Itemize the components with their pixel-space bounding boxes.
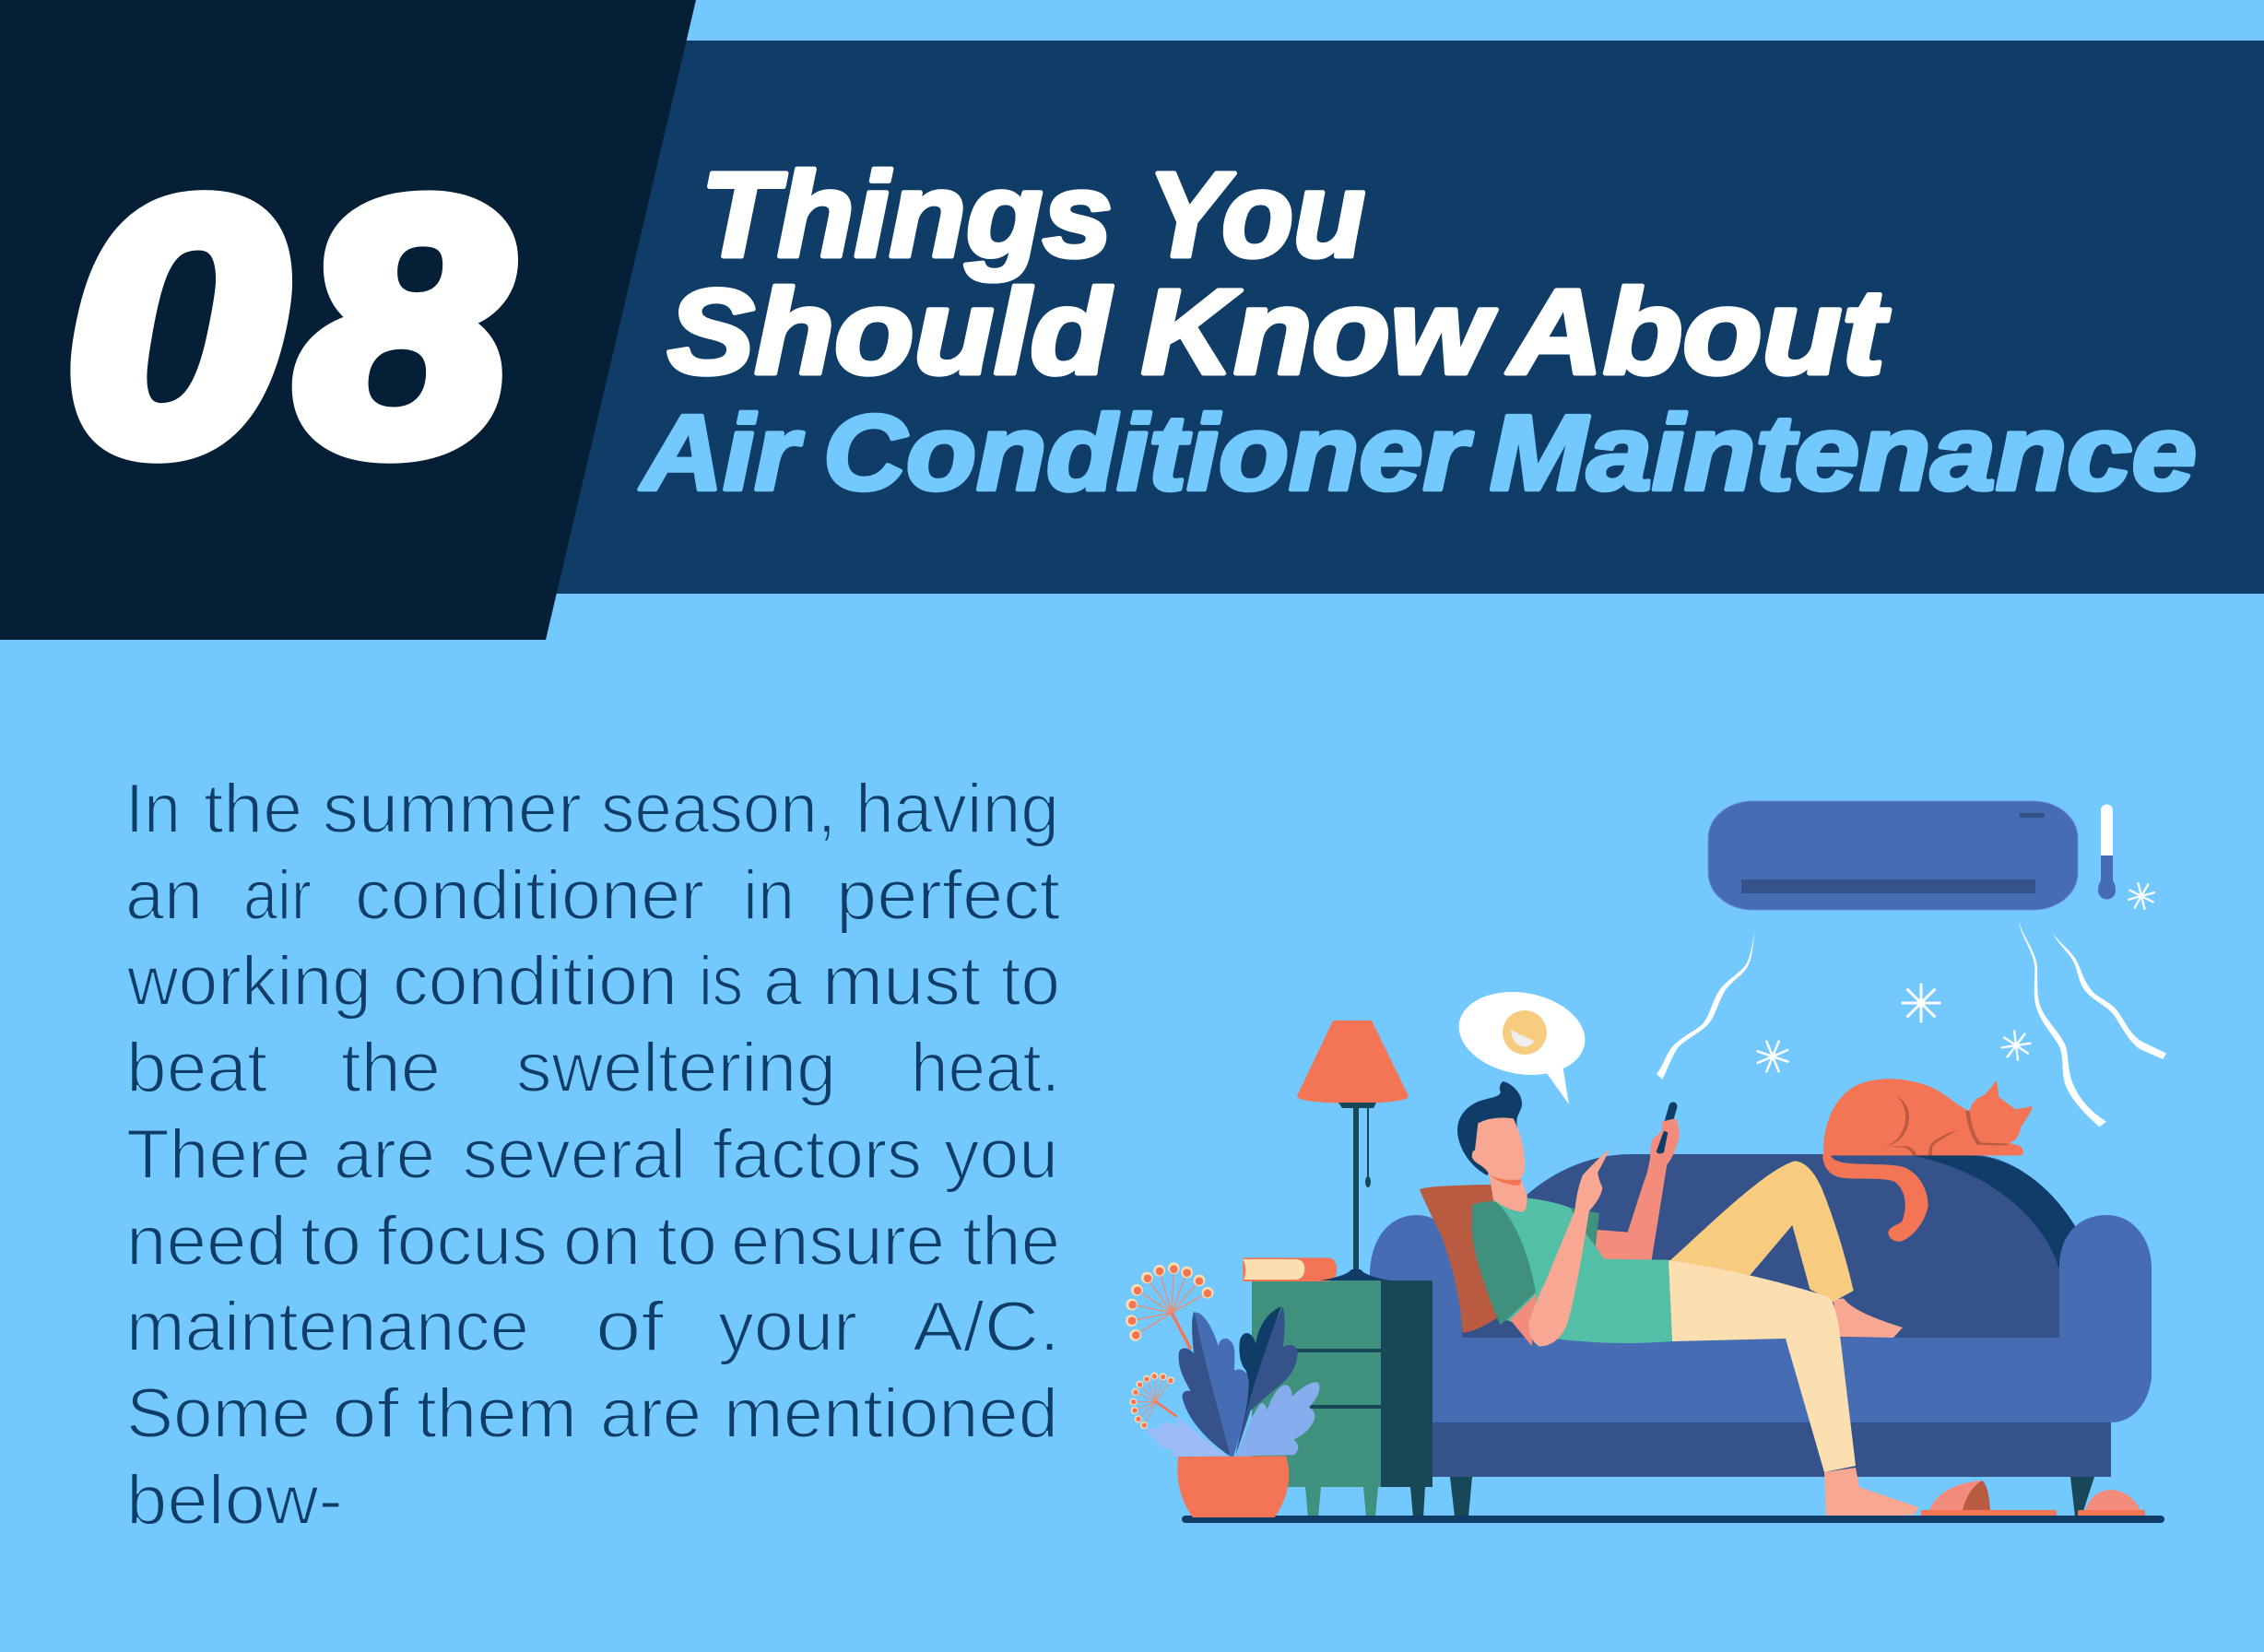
flower bud centres — [1128, 1265, 1211, 1428]
title — [639, 147, 2197, 513]
body paragraph: working — [126, 942, 371, 1021]
body paragraph: perfect — [836, 856, 1060, 935]
body paragraph: in — [743, 856, 795, 935]
title line 1: Things — [701, 147, 1113, 282]
body paragraph — [125, 770, 1060, 1540]
title line 3: Conditioner — [823, 393, 1473, 513]
body paragraph: In — [125, 770, 181, 848]
back leg and foot — [1670, 1161, 1903, 1338]
title line 2: Should — [667, 264, 1113, 399]
body paragraph: them — [417, 1375, 577, 1453]
cat — [1822, 1079, 2033, 1242]
potted plant — [1146, 1306, 1320, 1517]
title line 3: Air — [639, 393, 804, 513]
body paragraph: are — [600, 1375, 702, 1453]
cat body — [1823, 1079, 2033, 1155]
flower stems — [1131, 1268, 1208, 1425]
body paragraph: sweltering — [516, 1029, 836, 1107]
plant leaves — [1146, 1306, 1320, 1457]
sofa seat and arms — [1370, 1215, 2152, 1422]
air conditioner unit — [1708, 801, 2078, 910]
flowers — [1126, 1262, 1213, 1429]
slippers — [1921, 1481, 2145, 1517]
body paragraph: below- — [126, 1461, 343, 1540]
sofa base — [1433, 1422, 2111, 1477]
pillow — [1420, 1185, 1530, 1333]
number 08: 8 — [299, 127, 510, 525]
body paragraph: having — [855, 770, 1059, 848]
speech bubble — [1452, 983, 1592, 1104]
body paragraph: heat. — [911, 1029, 1060, 1107]
icon: snowflakes — [1758, 882, 2155, 1071]
body paragraph: to — [1001, 942, 1060, 1021]
body paragraph: air — [243, 856, 312, 935]
sofa legs — [1450, 1477, 2094, 1516]
illustration — [1126, 801, 2166, 1523]
title line 1: You — [1148, 147, 1365, 282]
body paragraph: the — [204, 770, 302, 848]
body paragraph: mentioned — [724, 1375, 1058, 1453]
number panel — [0, 0, 696, 640]
book — [1243, 1257, 1337, 1281]
title line 3: Maintenance — [1490, 393, 2197, 513]
body paragraph: on — [563, 1202, 641, 1280]
body paragraph: ensure — [731, 1202, 945, 1280]
body paragraph: summer — [323, 770, 582, 848]
number 08 — [66, 127, 510, 525]
front leg and foot — [1669, 1260, 1918, 1517]
sofa back shadow — [1911, 1155, 2083, 1338]
body paragraph: Some — [126, 1375, 311, 1453]
body paragraph: is — [699, 942, 743, 1021]
body paragraph: maintenance — [126, 1288, 529, 1366]
flower buds — [1126, 1262, 1213, 1429]
plant pot — [1177, 1456, 1289, 1517]
cat fur lines — [1885, 1097, 2008, 1155]
pointing arm — [1528, 1149, 1610, 1347]
cold air streams — [1657, 921, 2166, 1127]
body paragraph: of — [332, 1375, 400, 1453]
body paragraph: There — [126, 1115, 311, 1194]
floor lamp — [1297, 1021, 1409, 1280]
body paragraph: season, — [601, 770, 836, 848]
shirt — [1472, 1198, 1672, 1346]
title line 2: About — [1506, 264, 1891, 399]
title line 1 — [701, 147, 1365, 282]
title line 3 — [639, 393, 2197, 513]
body paragraph: the — [341, 1029, 441, 1107]
body paragraph: of — [595, 1288, 665, 1366]
lamp base on nightstand — [1320, 1269, 1390, 1280]
body paragraph: condition — [393, 942, 678, 1021]
body paragraph: several — [463, 1115, 686, 1194]
body paragraph: a — [763, 942, 803, 1021]
body paragraph: are — [334, 1115, 435, 1194]
neck and head — [1457, 1081, 1527, 1212]
floor line — [1182, 1516, 2164, 1523]
body paragraph: A/C. — [913, 1288, 1060, 1366]
nightstand — [1252, 1280, 1433, 1517]
body paragraph: to — [657, 1202, 717, 1280]
body paragraph: factors — [713, 1115, 922, 1194]
sofa — [1370, 1154, 2152, 1516]
body paragraph: an — [125, 856, 203, 935]
body paragraph: your — [718, 1288, 857, 1366]
man on the sofa — [1457, 1081, 1918, 1517]
header banner — [0, 41, 2264, 594]
body paragraph: you — [944, 1115, 1058, 1194]
arm holding remote — [1596, 1106, 1680, 1261]
icon: thermometer — [2098, 804, 2116, 900]
sofa back — [1462, 1154, 2111, 1338]
body paragraph: focus — [377, 1202, 548, 1280]
body paragraph: beat — [126, 1029, 267, 1107]
title line 2: Know — [1141, 264, 1497, 399]
title line 2 — [667, 264, 1891, 399]
body paragraph: need — [126, 1202, 287, 1280]
body paragraph: to — [301, 1202, 361, 1280]
cat tail — [1822, 1154, 1928, 1242]
body paragraph: must — [822, 942, 981, 1021]
body paragraph: conditioner — [355, 856, 704, 935]
body paragraph: the — [962, 1202, 1060, 1280]
number 08: 0 — [66, 127, 284, 525]
